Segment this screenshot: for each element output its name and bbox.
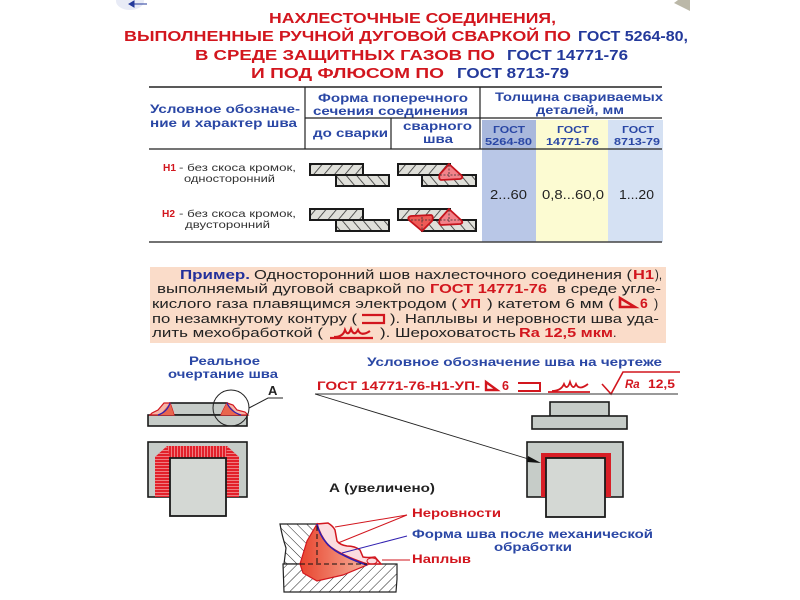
example line 5: ). Шероховатость [380,326,516,340]
heading: enlarged detail: А (увеличено) [329,483,435,495]
GOST column labels: 8713-79 [614,137,661,148]
designation formula: ГОСТ 14771-76-Н1-УП- [317,381,480,393]
example line 1: Односторонний шов нахлесточного соединения ( [254,268,633,282]
arrow: leader to seam [315,394,541,463]
column header: designation: Условное обозначе- [150,104,300,116]
thickness values [490,187,654,202]
title [124,11,688,82]
column header: thickness: Толщина свариваемых [495,92,664,104]
column header: thickness [495,92,664,117]
corner decoration: grey fragment [674,0,690,11]
table [149,87,664,242]
drawing: real seam side view: А [268,383,278,398]
H2 before welding [310,209,389,231]
callout: irregularities: Неровности [412,508,501,520]
row H2 label: Н2 [162,208,175,220]
column header: cross-section form: до сварки [313,128,388,140]
heading: conventional designation: Условное обозначение шва на чертеже [367,357,662,369]
example line 1 [180,268,662,282]
GOST column labels: ГОСТ [557,125,589,136]
example line 1: Н1 [633,268,654,282]
excess metal [317,523,381,564]
column header: cross-section form: шва [423,134,454,146]
row H2 label: двусторонний [185,219,270,231]
title: И ПОД ФЛЮСОМ ПО [251,66,444,82]
heading: real seam outline: Реальное [189,356,260,368]
title: ВЫПОЛНЕННЫЕ РУЧНОЙ ДУГОВОЙ СВАРКОЙ ПО [124,27,571,45]
example line 4: по незамкнутому контуру ( [152,312,358,326]
row H1 label: односторонний [184,173,275,185]
designation formula: 6 [502,379,509,393]
designation formula: 12,5 [648,379,676,391]
GOST column labels: 5264-80 [485,137,533,148]
machined profile [317,524,367,565]
example line 3: ) [654,297,658,311]
left weld [150,403,174,415]
GOST column labels: ГОСТ [622,125,654,136]
drawing: conventional seam top view [527,442,623,517]
example line 2: ГОСТ 14771-76 [430,282,547,296]
callout lines [335,515,407,543]
H1 after welding [398,164,476,186]
row H1 label: - без скоса кромок, [179,162,296,174]
example line 1: ), [655,268,662,282]
callout: seam shape after machining: Форма шва после механической [412,529,653,541]
drawing: real seam side view [148,383,283,426]
row H2 label [162,208,296,231]
example line 5: лить мехобработкой ( [152,326,324,340]
example line 2: в среде угле- [557,282,661,296]
column header: cross-section form: сечения соединения [313,106,468,118]
column header: cross-section form: сварного [403,121,472,133]
example line 2: выполняемый дуговой сваркой по [157,282,425,296]
drawing: enlarged detail A [280,515,410,592]
thickness values: 1...20 [619,187,654,202]
example line 3: ) катетом 6 мм ( [487,297,615,311]
title: НАХЛЕСТОЧНЫЕ СОЕДИНЕНИЯ, [269,11,556,27]
hatched plates [280,524,318,564]
GOST column labels [485,125,661,148]
column header: cross-section form [313,93,472,146]
dashed axes [300,526,367,564]
example line 2 [157,282,661,296]
column header: cross-section form: Форма поперечного [318,93,468,105]
heading: real seam outline: очертание шва [168,369,279,381]
example line 4: ). Наплывы и неровности шва уда- [390,312,659,326]
title: ГОСТ 14771-76 [507,48,628,64]
drawing: conventional seam side view [532,402,627,429]
example line 4 [152,312,659,326]
H1 before welding [310,164,389,186]
designation formula [315,372,680,394]
callout: seam shape after machining: обработки [494,542,572,554]
example line 3: 6 [640,295,648,311]
thickness column backgrounds [482,120,663,242]
example line 5: Ra 12,5 мкм [519,326,613,340]
corner decoration: blue arrow [116,0,147,10]
thickness values: 0,8...60,0 [542,187,604,202]
example line 5 [152,326,616,340]
callout: overflow: Наплыв [412,554,471,566]
GOST column labels: 14771-76 [546,137,600,148]
weld body [300,524,367,581]
column header: thickness: деталей, мм [536,105,624,117]
example line 3: кислого газа плавящимся электродом ( [152,297,458,311]
designation formula: Ra [625,379,640,391]
example line 3: УП [461,297,481,311]
heading: real seam outline [168,356,279,381]
row H2 label: - без скоса кромок, [179,208,296,220]
thickness values: 2...60 [490,187,527,202]
drawing: real seam top view [148,442,247,516]
example line 3 [152,295,658,311]
example line 1: Пример. [180,268,250,282]
GOST column labels: ГОСТ [493,125,525,136]
title: ГОСТ 8713-79 [457,66,569,82]
panel: example [150,267,666,343]
row H1 label [163,162,296,185]
column header: designation [150,104,300,130]
row H1 label: Н1 [163,162,176,174]
detail circle A [213,390,249,426]
title: ГОСТ 5264-80, [578,29,688,45]
callout: seam shape after machining [412,529,653,554]
right weld [221,403,248,415]
column header: designation: ние и характер шва [150,118,298,130]
example line 5: . [613,326,616,340]
H2 after welding [398,209,476,231]
title: В СРЕДЕ ЗАЩИТНЫХ ГАЗОВ ПО [195,48,495,64]
